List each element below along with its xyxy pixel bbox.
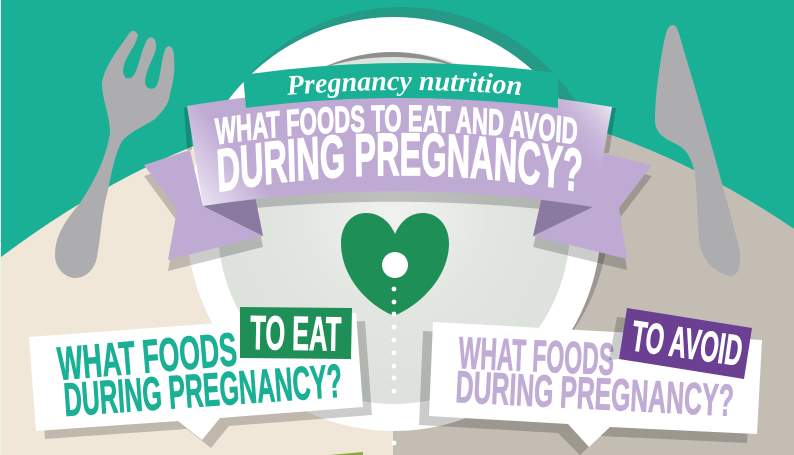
ribbon tail left [144,150,263,260]
callout: foods to eat [29,307,372,448]
callout heading line 2: DURING PREGNANCY? [454,361,735,426]
headline line 2: DURING PREGNANCY? [217,132,582,192]
plate [187,7,609,431]
callout heading line 2: DURING PREGNANCY? [62,354,344,426]
callout body [429,322,762,447]
subtitle: Pregnancy nutrition [288,72,521,98]
dotted line from heart [392,325,396,445]
table: two-tone surface [1,134,794,455]
callout shadow [419,331,752,455]
callout heading line 1: WHAT FOODS [458,328,615,385]
plate centre [218,52,570,404]
headline [214,104,582,192]
plate shadow [237,7,606,330]
callout shadow [38,321,372,448]
icon: heart [341,213,449,316]
tag: to avoid: TO AVOID [629,313,745,376]
ribbon main [187,88,612,207]
callout heading line 1: WHAT FOODS [55,323,239,391]
tag: to eat: TO EAT [250,307,342,362]
green subtitle ribbon [243,63,558,108]
callout: foods to avoid [419,308,762,455]
ribbon fold left [203,196,263,236]
icon: fork [55,31,174,278]
olive strip at bottom [330,452,363,455]
banner ribbon [144,63,652,271]
icon: knife [655,25,740,276]
callout body [29,313,363,440]
headline line 1: WHAT FOODS TO EAT AND AVOID [214,104,578,144]
ribbon tail right [533,153,652,259]
ribbon fold right [533,196,593,236]
plate rim [187,17,601,431]
ribbon shadows [144,106,652,271]
